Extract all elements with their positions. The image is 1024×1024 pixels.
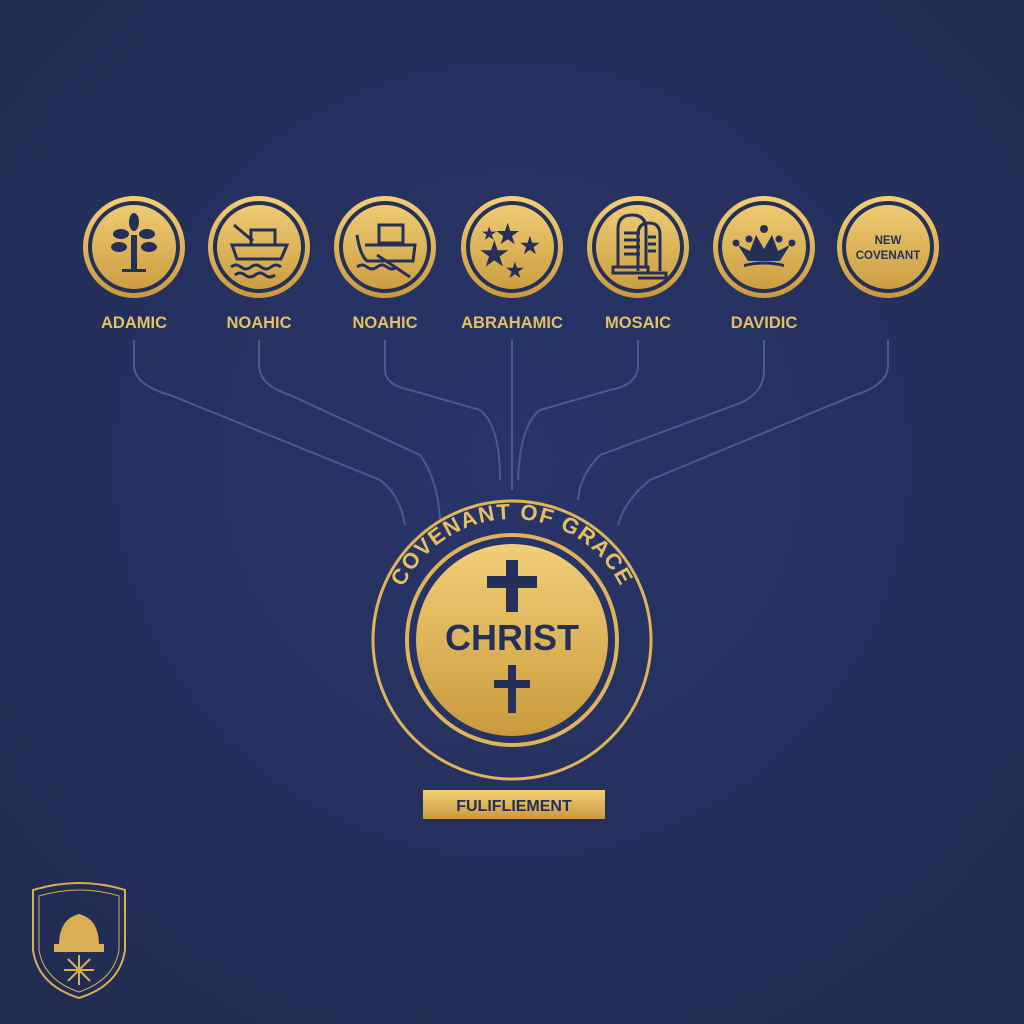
text: new covenant: COVENANT — [856, 250, 920, 262]
icon: crown — [732, 225, 796, 267]
arc text: COVENANT OF GRACE — [392, 504, 633, 586]
icon: stars: ★ — [496, 219, 520, 249]
fulfilment label: FULIFLIEMENT — [456, 798, 572, 815]
labels: ABRAHAMIC — [461, 314, 563, 332]
icon: tablets — [613, 215, 666, 278]
labels: ADAMIC — [101, 314, 167, 332]
badge: adamic — [83, 196, 185, 298]
icon: ark — [357, 225, 415, 277]
badge: mosaic — [587, 196, 689, 298]
icon: stars: ★ — [480, 236, 509, 272]
badge: davidic — [713, 196, 815, 298]
labels: NOAHIC — [226, 314, 292, 332]
icon: stars — [480, 219, 540, 282]
labels: NOAHIC — [352, 314, 418, 332]
labels: MOSAIC — [605, 314, 671, 332]
text: new covenant — [856, 235, 920, 262]
labels — [101, 314, 797, 332]
covenant badges — [83, 196, 939, 298]
labels: DAVIDIC — [731, 314, 797, 332]
icon: ark — [231, 225, 287, 277]
christ text: CHRIST — [445, 617, 579, 658]
icon: tree — [111, 213, 157, 272]
icon: stars: ★ — [506, 260, 524, 282]
icon: stars: ★ — [520, 233, 540, 258]
badge: noahic 2 — [334, 196, 436, 298]
text: new covenant: NEW — [875, 235, 902, 247]
badge: abrahamic — [461, 196, 563, 298]
icon: stars: ★ — [482, 226, 497, 243]
icon: cross top — [487, 560, 537, 612]
badge: noahic 1 — [208, 196, 310, 298]
icon: cross bottom — [494, 665, 530, 713]
central seal: covenant of grace / christ — [372, 500, 652, 780]
emblem shield — [33, 883, 125, 998]
badge: new covenant — [837, 196, 939, 298]
connector lines — [134, 340, 888, 525]
fulfilment label — [423, 790, 605, 819]
